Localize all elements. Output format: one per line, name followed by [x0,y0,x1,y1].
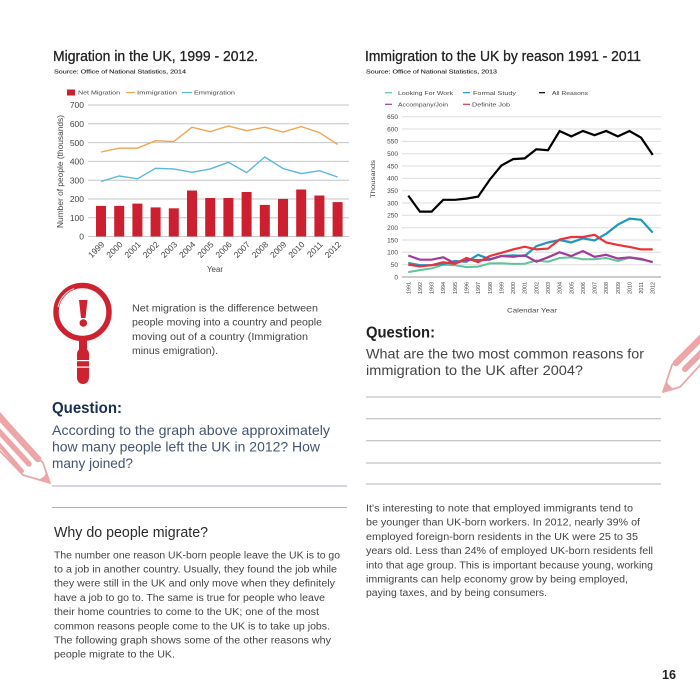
left chart title: Source: Office of National Statistics, 2014 [54,70,186,76]
paragraph: why people migrate: they were still in the UK and only move when they definitely [54,579,335,590]
net migration note [132,304,322,357]
right chart title: Immigration to the UK by reason 1991 - 2011 [365,48,641,65]
left question: Question: [52,400,122,417]
chart: immigration by reason: 2000 [511,282,517,294]
left question: how many people left the UK in 2012? How [52,438,321,454]
chart: migration in the UK: 300 [70,175,84,185]
migration chart legend: Emmigration [194,91,235,97]
right question [366,324,644,378]
immigration chart legend: Definite Job [472,102,510,108]
immigration chart legend: Accompany/Join [398,102,448,108]
net migration note: Net migration is the difference between [132,304,318,315]
chart: immigration by reason: 1999 [499,282,505,294]
chart: immigration by reason: 250 [387,213,398,220]
chart: migration in the UK: 200 [70,194,84,204]
chart: immigration by reason: 2001 [523,282,529,294]
chart: immigration by reason: Calendar Year [507,308,558,314]
page number: 16 [662,667,676,682]
left answer lines [52,486,347,508]
paragraph: employed immigrants: employed foreign-born residents in the UK were 25 to 35 [366,532,638,543]
paragraph: why people migrate [54,550,340,661]
chart: immigration by reason: 400 [387,176,398,183]
chart: immigration by reason: 2007 [592,282,598,294]
chart: immigration by reason: 150 [387,237,398,244]
immigration chart legend: All Reasons [552,91,588,97]
chart: immigration by reason: 1994 [441,282,447,294]
chart: immigration by reason: Thousands [370,159,377,198]
left chart title [53,48,258,76]
left question [52,400,330,471]
paragraph: why people migrate: have a job to go to. The same is true for people who leave [54,593,325,604]
chart: migration in the UK: Year [207,265,223,274]
paragraph: why people migrate: their home countries to come to the UK; one of the most [54,607,319,618]
chart: immigration by reason: 2004 [558,282,564,294]
immigration chart legend [385,91,588,108]
chart: migration in the UK: 100 [70,213,84,223]
chart: immigration by reason: 1992 [418,282,424,294]
chart: immigration by reason: 2010 [628,282,634,294]
right question: Question: [366,324,435,342]
chart: migration in the UK: 500 [70,138,84,148]
chart: migration in the UK: 2006 [213,239,234,260]
chart: migration in the UK: 2004 [177,239,198,260]
chart: migration in the UK: Number of people (thousands) [55,115,65,228]
paragraph: why people migrate: common reasons people come to the UK is to take up jobs. [54,621,330,632]
net migration note: minus emigration). [132,346,218,357]
migration chart legend [67,90,235,97]
chart: immigration by reason [370,114,661,314]
chart: immigration by reason: 1998 [488,282,494,294]
paragraph: why people migrate: The number one reason UK-born people leave the UK is to go [54,550,340,562]
chart: immigration by reason: 1997 [476,282,482,294]
chart: immigration by reason: 100 [387,250,398,257]
paragraph: employed immigrants: years old. Less than 24% of employed UK-born residents fell [366,546,653,557]
paragraph: employed immigrants: be younger than UK-born workers. In 2012, nearly 39% of [366,518,640,529]
paragraph: why people migrate: The following graph shows some of the other reasons why [54,635,331,646]
chart: immigration by reason: 2002 [534,282,540,294]
right chart title [365,48,641,76]
chart: migration in the UK: 400 [70,157,84,167]
paragraph: employed immigrants: into that age group. This is important because young, working [366,560,653,571]
chart: migration in the UK: 2007 [232,239,252,260]
chart: migration in the UK: 2008 [250,239,270,260]
chart: immigration by reason: 50 [391,262,398,269]
chart: migration in the UK: 600 [70,119,84,129]
paragraph: employed immigrants: immigrants can help economy grow by being employed, [366,574,628,585]
right question: What are the two most common reasons for [366,346,644,362]
chart: immigration by reason: 2006 [581,282,587,294]
chart: immigration by reason: 1996 [464,282,470,294]
migration chart legend: Net Migration [78,91,120,97]
chart: migration in the UK: 1999 [86,239,107,260]
icon: magnifying glass with exclamation mark [56,286,109,384]
chart: migration in the UK: 2001 [122,239,143,260]
icon: left pencil [0,411,50,483]
chart: immigration by reason: 1995 [453,282,459,294]
chart: immigration by reason: 1993 [430,282,436,294]
paragraph: employed immigrants [366,504,653,599]
chart: immigration by reason: 1991 [406,282,412,294]
chart: immigration by reason: 500 [387,151,398,158]
chart: migration in the UK: 2010 [286,239,307,260]
chart: immigration by reason: 2009 [616,282,622,294]
chart: migration in the UK: 2000 [104,239,125,260]
migration chart legend: Immigration [137,91,177,97]
chart: migration in the UK: 2011 [305,239,325,259]
net migration note: moving out of a country (Immigration [132,332,308,343]
chart: immigration by reason: 2003 [546,282,552,294]
chart: immigration by reason: 600 [387,126,398,133]
chart: migration in the UK: 2005 [195,239,216,260]
chart: immigration by reason: 2008 [604,282,610,294]
paragraph: why people migrate: to a job in another country. Usually, they found the job while [54,564,337,576]
net migration note: people moving into a country and people [132,318,322,329]
chart: immigration by reason: 300 [387,200,398,207]
chart: migration in the UK: 0 [79,232,84,242]
chart: immigration by reason: 2011 [639,282,645,294]
chart: migration in the UK: 2002 [141,239,161,260]
chart: migration in the UK: 2012 [323,239,343,260]
left question: According to the graph above approximately [52,422,330,438]
chart: immigration by reason: 200 [387,225,398,232]
paragraph: employed immigrants: paying taxes, and by being consumers. [366,588,547,599]
chart: migration in the UK: 700 [70,100,84,110]
chart: migration in the UK [55,100,349,274]
chart: immigration by reason: 2005 [569,282,575,294]
paragraph: why people migrate: people migrate to the UK. [54,650,175,661]
immigration chart legend: Looking For Work [398,91,453,97]
chart: immigration by reason: 650 [387,114,398,121]
icon: right pencil [663,336,700,392]
chart: immigration by reason: 550 [387,139,398,146]
right chart title: Source: Office of National Statistics, 2013 [366,70,497,76]
chart: migration in the UK: 2009 [268,239,289,260]
right question: immigration to the UK after 2004? [366,362,583,378]
immigration chart legend: Formal Study [473,91,516,97]
paragraph: employed immigrants: It's interesting to note that employed immigrants tend to [366,504,633,515]
chart: migration in the UK: 2003 [159,239,179,260]
chart: immigration by reason: 450 [387,163,398,170]
chart: immigration by reason: 2012 [651,282,657,294]
left chart title: Migration in the UK, 1999 - 2012. [53,48,258,65]
chart: immigration by reason: 0 [394,274,398,281]
right answer lines [366,397,661,484]
chart: immigration by reason: 350 [387,188,398,195]
heading: why do people migrate: Why do people migrate? [54,525,208,541]
left question: many joined? [52,455,133,471]
